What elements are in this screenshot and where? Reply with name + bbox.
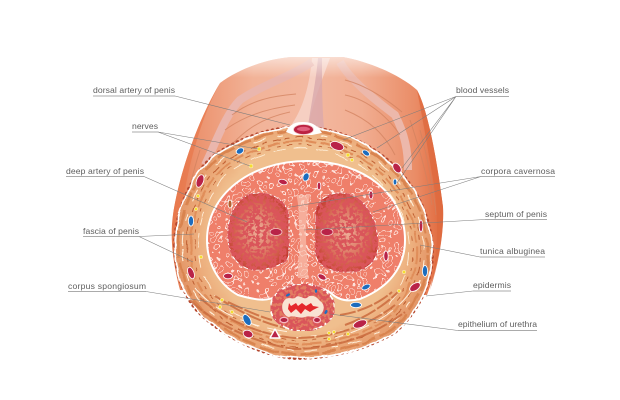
panel: left corpus cavernosum	[228, 193, 289, 270]
label: tunica albuginea	[420, 245, 545, 257]
panel: septum of penis	[296, 195, 310, 278]
label: epidermis: epidermis	[473, 280, 511, 290]
label: deep artery of penis	[66, 166, 247, 222]
label: dorsal artery of penis	[93, 85, 290, 125]
panel: corpus spongiosum with urethra	[270, 284, 334, 331]
vessels: veins	[188, 147, 428, 327]
label: fascia of penis	[83, 226, 194, 262]
artery: dorsal artery of penis	[286, 122, 322, 135]
label: dorsal artery of penis: dorsal artery of penis	[93, 85, 175, 95]
label: deep artery of penis: deep artery of penis	[66, 166, 144, 176]
label: corpora cavernosa	[290, 166, 555, 212]
label: tunica albuginea: tunica albuginea	[480, 246, 545, 256]
nerves: yellow dots	[194, 147, 406, 341]
panel: tunica albuginea and erectile tissue	[207, 161, 405, 300]
panel: background tissue behind the cross-section	[172, 57, 443, 295]
panel: skin and fascia ring	[175, 127, 432, 358]
label: nerves	[132, 121, 258, 166]
label: nerves: nerves	[132, 121, 158, 131]
label: epidermis	[426, 280, 511, 296]
panel: right corpus cavernosum	[315, 193, 378, 272]
vessels: arteries	[186, 140, 423, 339]
label: blood vessels	[343, 85, 509, 183]
label: blood vessels: blood vessels	[456, 85, 509, 95]
label: epithelium of urethra	[330, 314, 537, 330]
label: epithelium of urethra: epithelium of urethra	[458, 319, 537, 329]
label: corpus spongiosum	[68, 281, 270, 312]
label: fascia of penis: fascia of penis	[83, 226, 139, 236]
urethra lumen and epithelium	[282, 296, 324, 318]
label: corpus spongiosum: corpus spongiosum	[68, 281, 146, 291]
label: corpora cavernosa: corpora cavernosa	[481, 166, 555, 176]
label: septum of penis: septum of penis	[485, 209, 547, 219]
label: septum of penis	[304, 209, 547, 230]
